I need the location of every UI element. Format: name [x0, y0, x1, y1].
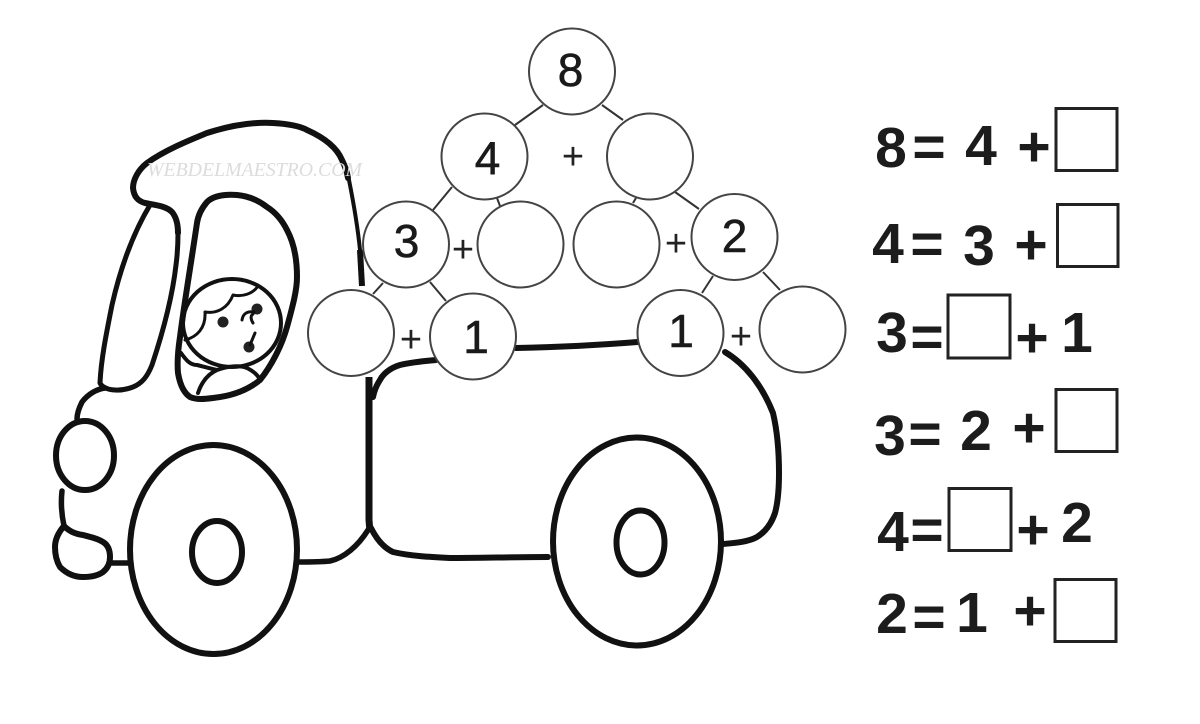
equation 4 = box + 2: 4 [877, 500, 909, 564]
equation 3 = 2 + box: 3 [874, 404, 906, 468]
circle 2: 2 [722, 210, 747, 262]
equation 2 = 1 + box: 1 [956, 581, 988, 645]
rear wheel [553, 438, 721, 646]
equation 3 = box + 1: 1 [1061, 301, 1093, 365]
cab back edge end [360, 250, 362, 286]
number bond tree [308, 28, 846, 380]
equation 4 = 3 + box: 4 [872, 212, 904, 276]
plus top: + [562, 136, 584, 178]
equation 3 = 2 + box [874, 390, 1117, 468]
equation 3 = box + 1 [876, 295, 1093, 370]
equation 4 = 3 + box [872, 204, 1118, 278]
circle 1 right [638, 290, 724, 376]
equation 3 = box + 1: = [910, 305, 944, 369]
circle 1 left [430, 294, 516, 380]
rear hub [616, 510, 664, 574]
front lower light [55, 526, 110, 577]
plus level 3 left: + [452, 229, 474, 271]
equation 4 = 3 + box: = [910, 212, 944, 276]
connector lines [373, 105, 780, 301]
watermark: WEBDELMAESTRO.COM [147, 159, 363, 181]
equation 4 = box + 2: 2 [1061, 491, 1093, 555]
circle 8 [529, 28, 615, 114]
equation 3 = 2 + box: = [908, 402, 942, 466]
equation 3 = 2 + box: 2 [960, 399, 992, 463]
circle 4 [442, 114, 528, 200]
cargo bed [371, 342, 779, 558]
equation 2 = 1 + box: + [1013, 579, 1047, 643]
circle 8: 8 [558, 44, 583, 96]
empty circle level 4 far right [760, 286, 846, 372]
front wheel [130, 445, 297, 654]
equation 4 = box + 2: = [910, 498, 944, 562]
empty circle level 3 right [574, 202, 660, 288]
empty circle level 3 left [478, 202, 564, 288]
equations [872, 108, 1118, 649]
circle 1 left: 1 [463, 311, 489, 363]
equation 4 = box + 2: + [1016, 498, 1050, 562]
driver window [178, 195, 297, 399]
front headlight [56, 421, 114, 490]
equation 4 = box + 2 [877, 488, 1093, 564]
plus level 3 right: + [665, 223, 687, 265]
circle 1 right: 1 [668, 305, 694, 357]
driver eyes and mouth [218, 304, 262, 352]
driver shoulders [181, 353, 260, 393]
circle 3 [363, 202, 449, 288]
empty circle level 2 right [607, 114, 693, 200]
cab back edge [349, 180, 360, 250]
driver [181, 279, 281, 393]
equation 4 = 3 + box: + [1014, 213, 1048, 277]
cab rear wall [369, 377, 370, 532]
circle 4: 4 [475, 132, 500, 184]
equation 8 = 4 + box: 8 [875, 116, 907, 180]
equation 8 = 4 + box [875, 108, 1117, 180]
equation 2 = 1 + box [876, 579, 1116, 649]
equation 3 = 2 + box: + [1012, 396, 1046, 460]
equation 3 = box + 1: + [1015, 306, 1049, 370]
equation 2 = 1 + box: = [912, 585, 946, 649]
equation 8 = 4 + box: = [912, 115, 946, 179]
plus level 4 right: + [730, 316, 752, 358]
driver head [183, 279, 281, 367]
equation 8 = 4 + box: + [1017, 115, 1051, 179]
equation 8 = 4 + box: 4 [965, 114, 997, 178]
truck [55, 123, 779, 654]
driver hair [185, 286, 258, 340]
cab front with bumper [61, 388, 368, 563]
cab roof outline [133, 123, 348, 233]
circle 2 [692, 194, 778, 280]
equation 4 = 3 + box: 3 [963, 214, 995, 278]
front hub [192, 521, 242, 583]
circle 3: 3 [394, 215, 419, 267]
equation 2 = 1 + box: 2 [876, 582, 908, 646]
plus level 4 left: + [400, 319, 422, 361]
equation 3 = box + 1: 3 [876, 301, 908, 365]
side window [100, 205, 178, 390]
empty circle level 4 far left [308, 290, 394, 376]
